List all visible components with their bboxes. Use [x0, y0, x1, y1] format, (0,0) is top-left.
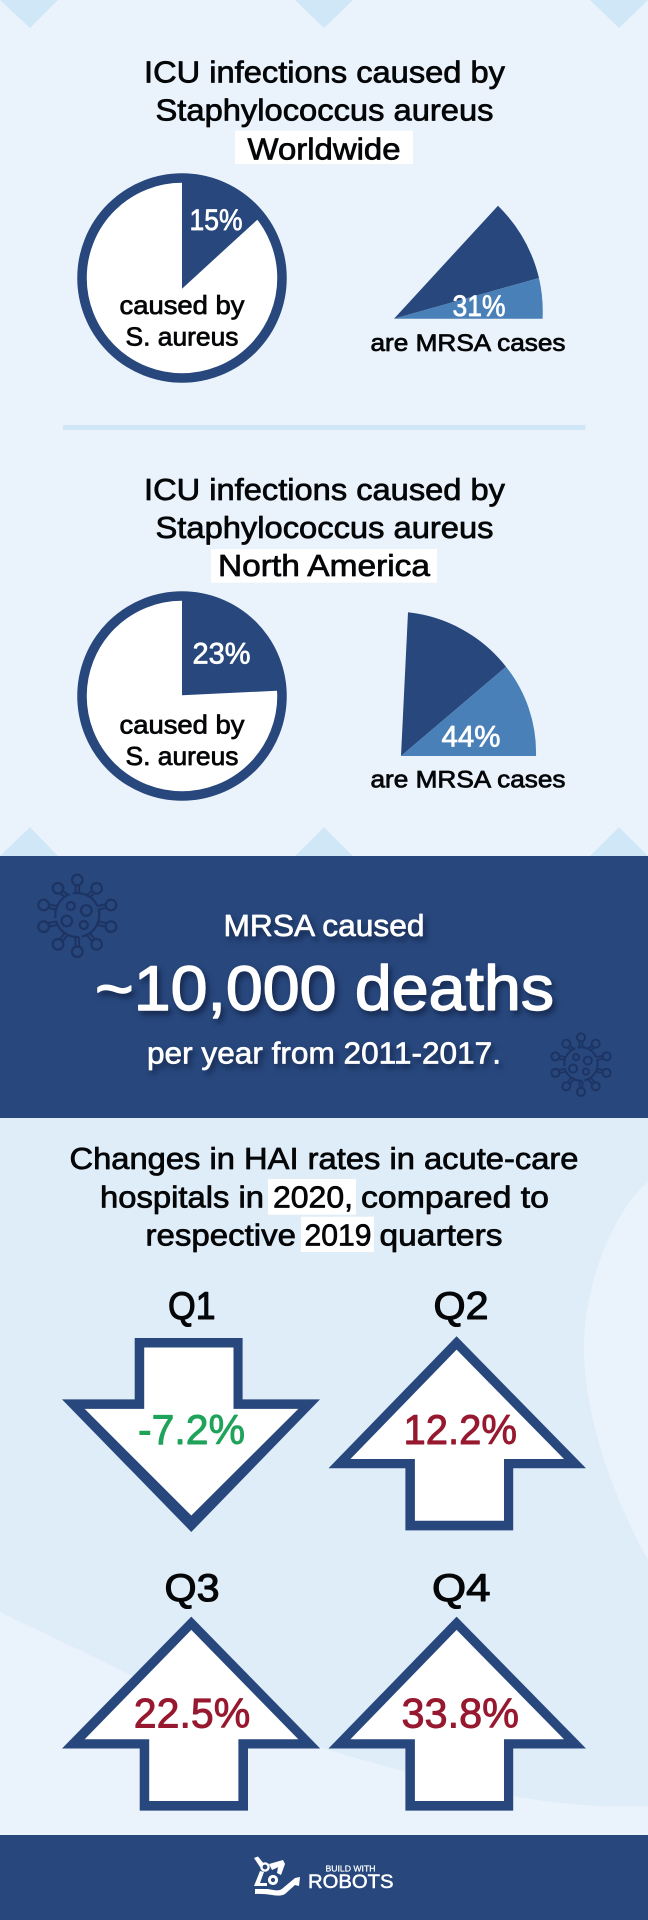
heading: HAI rates: 2020, — [273, 1180, 353, 1214]
pie chart: 15% caused by S. aureus — [82, 178, 282, 378]
icon: robot arm logo — [254, 1856, 300, 1896]
icon: small virus — [551, 1033, 611, 1096]
heading: north america: Staphylococcus aureus — [156, 511, 494, 545]
heading: HAI rates: respective — [146, 1219, 296, 1253]
heading: HAI rates: 2019 — [304, 1219, 372, 1253]
Q4 arrow up — [328, 1567, 586, 1811]
pie chart: 23% caused by S. aureus: caused by — [120, 709, 244, 739]
Q2 arrow up: 12.2% — [404, 1406, 517, 1453]
pie chart: 23% caused by S. aureus — [82, 596, 282, 796]
Q2 arrow up: Q2 — [434, 1285, 488, 1328]
heading: worldwide: Worldwide — [248, 132, 400, 166]
heading: north america: North America — [218, 549, 430, 583]
heading: north america: ICU infections caused by — [144, 473, 506, 507]
pie chart: 15% caused by S. aureus: caused by — [120, 290, 244, 320]
icon: large virus — [38, 875, 116, 957]
heading: HAI rates: hospitals in — [100, 1180, 264, 1214]
pie chart: 15% caused by S. aureus: 15% — [190, 204, 242, 237]
footer — [0, 1835, 648, 1920]
heading: HAI rates: Changes in HAI rates in acute-care — [70, 1142, 578, 1176]
logo text: ROBOTS — [308, 1871, 394, 1893]
Q2 arrow up — [328, 1285, 586, 1530]
heading: north america — [144, 473, 506, 583]
heading: worldwide — [144, 56, 506, 166]
panel: HAI rate changes — [0, 1118, 648, 1835]
heading: HAI rates: compared to — [361, 1180, 549, 1214]
wedge chart: 44% are MRSA cases: 44% — [442, 721, 500, 754]
Q1 arrow down — [62, 1285, 320, 1532]
heading: worldwide: Staphylococcus aureus — [156, 94, 494, 128]
text: MRSA caused: MRSA caused — [224, 908, 424, 943]
Q1 arrow down: -7.2% — [138, 1406, 245, 1453]
text: per year from 2011-2017: per year from 2011-2017. — [147, 1035, 501, 1070]
wedge chart: 31% are MRSA cases: 31% — [452, 290, 506, 323]
wedge chart: 44% are MRSA cases — [370, 612, 566, 793]
panel: worldwide — [82, 56, 566, 378]
Q4 arrow up: Q4 — [432, 1567, 490, 1610]
text: ~10,000 deaths: ~10,000 deaths — [95, 954, 554, 1024]
Q3 arrow up: 22.5% — [134, 1689, 250, 1736]
pie chart: 23% caused by S. aureus: 23% — [192, 637, 250, 670]
heading: HAI rates: quarters — [380, 1219, 502, 1253]
Q4 arrow up: 33.8% — [402, 1689, 519, 1736]
pie chart: 23% caused by S. aureus: S. aureus — [126, 741, 238, 771]
pie chart: 15% caused by S. aureus: S. aureus — [126, 322, 238, 352]
Q1 arrow down: Q1 — [168, 1285, 216, 1328]
logo text: BUILD WITH — [326, 1864, 376, 1874]
Q3 arrow up — [62, 1567, 320, 1811]
wedge chart: 44% are MRSA cases: are MRSA cases — [370, 766, 566, 793]
panel: north america — [82, 473, 566, 796]
panel: deaths banner — [0, 856, 648, 1118]
wedge chart: 31% are MRSA cases — [370, 206, 566, 357]
Q3 arrow up: Q3 — [164, 1567, 220, 1610]
heading: HAI rates — [70, 1142, 578, 1253]
heading: worldwide: ICU infections caused by — [144, 56, 506, 90]
wedge chart: 31% are MRSA cases: are MRSA cases — [370, 330, 566, 357]
